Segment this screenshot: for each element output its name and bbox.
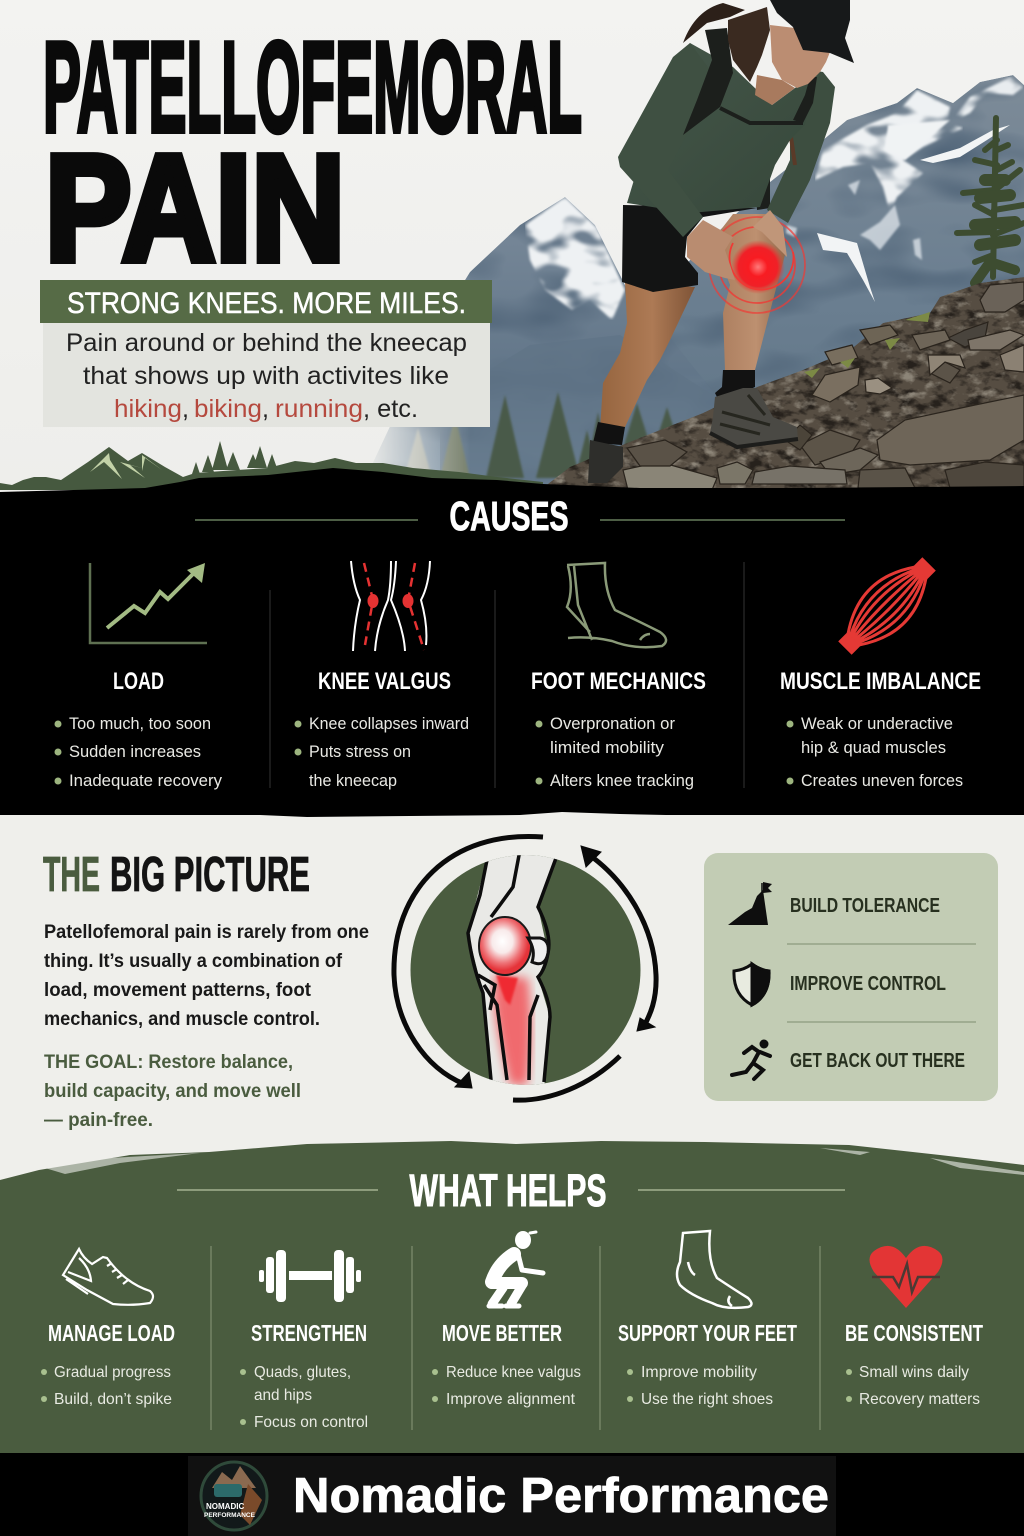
help: move better: Reduce knee valgus: [446, 1364, 581, 1381]
big picture heading: THE: [43, 848, 100, 902]
rocky slope foreground: [540, 277, 1024, 490]
help: strengthen: and hips: [254, 1387, 312, 1404]
what helps heading: WHAT HELPS: [410, 1165, 606, 1216]
title: [43, 16, 582, 292]
definition text box: Pain around or behind the kneecap: [66, 329, 467, 357]
big picture paragraph: load, movement patterns, foot: [44, 980, 312, 1001]
big picture heading: BIG PICTURE: [110, 848, 310, 902]
action panel: IMPROVE CONTROL: [790, 973, 946, 995]
icon: shield: [734, 964, 769, 1005]
front shoe: [710, 388, 798, 448]
definition text box: hiking: [114, 395, 182, 423]
knee bones: [468, 850, 559, 1090]
causes heading: CAUSES: [450, 493, 568, 539]
left snowy peak with fog fade: [373, 197, 674, 484]
right arm: [767, 70, 835, 223]
action panel: GET BACK OUT THERE: [790, 1050, 965, 1072]
help: manage load: [41, 1249, 175, 1408]
jacket torso: [627, 43, 815, 213]
logo badge: PERFORMANCE: [204, 1512, 256, 1519]
tagline banner: STRONG KNEES. MORE MILES.: [67, 287, 466, 320]
ponytail: [683, 3, 745, 43]
help: manage load: Build, don’t spike: [54, 1391, 172, 1408]
cause: knee valgus: Knee collapses inward: [309, 715, 469, 733]
face: [770, 25, 830, 88]
hiker: [588, 0, 854, 483]
cause: foot mechanics: [531, 563, 706, 790]
right hand: [753, 210, 787, 257]
neck: [755, 75, 795, 105]
cause: knee valgus: Puts stress on: [309, 743, 411, 761]
definition text box: ,: [262, 395, 269, 423]
icon: runner: [732, 1040, 770, 1079]
big picture heading: [43, 848, 310, 902]
cause: foot mechanics: Overpronation or: [550, 715, 675, 733]
cause: foot mechanics: Alters knee tracking: [550, 772, 694, 790]
the goal statement: build capacity, and move well: [44, 1081, 301, 1102]
backpack back piece: [753, 167, 770, 210]
help: support your feet: Improve mobility: [641, 1364, 757, 1381]
cause: muscle imbalance: Weak or underactive: [801, 715, 953, 733]
icon: knees collapsing inward: [351, 561, 430, 651]
definition text box: [43, 323, 490, 427]
icon: rising load chart: [90, 563, 207, 643]
help: move better: [432, 1231, 581, 1408]
big picture paragraph: mechanics, and muscle control.: [44, 1009, 320, 1030]
icon: running shoe: [63, 1249, 153, 1305]
action panel: [704, 853, 998, 1101]
cause: foot mechanics: FOOT MECHANICS: [531, 668, 706, 695]
tagline banner: [40, 280, 492, 323]
cause: load: Inadequate recovery: [69, 772, 223, 790]
big picture paragraph: [44, 922, 369, 1030]
definition text box: that shows up with activites like: [83, 362, 449, 390]
green circle: [410, 855, 640, 1085]
definition text box: ,: [182, 395, 189, 423]
knee diagram with cycle arrows: [394, 836, 656, 1100]
help: manage load: Gradual progress: [54, 1364, 171, 1381]
knee pain glow with rings: [709, 217, 805, 313]
back leg: [600, 282, 695, 430]
logo badge: NOMADIC: [206, 1502, 244, 1511]
the goal statement: THE GOAL: Restore balance,: [44, 1052, 293, 1073]
cause: knee valgus: KNEE VALGUS: [318, 668, 451, 695]
cycle arrows: [394, 836, 656, 1100]
logo badge: [201, 1462, 267, 1530]
help: manage load: MANAGE LOAD: [48, 1320, 175, 1346]
back shoe: [588, 440, 623, 483]
help: support your feet: [618, 1231, 797, 1408]
causes section background: [0, 468, 1024, 817]
front sock: [715, 370, 755, 403]
help: be consistent: [845, 1246, 983, 1408]
icon: bare foot: [677, 1231, 752, 1308]
brand name: Nomadic Performance: [293, 1469, 829, 1523]
help: support your feet: SUPPORT YOUR FEET: [618, 1320, 797, 1346]
cause: foot mechanics: limited mobility: [550, 739, 665, 757]
cause: load: LOAD: [113, 668, 164, 695]
icon: summit flag: [728, 882, 772, 925]
cause: load: [54, 563, 223, 790]
help: strengthen: Focus on control: [254, 1414, 368, 1431]
title: PAIN: [45, 123, 345, 292]
cap: [770, 0, 854, 63]
definition text box: , etc.: [363, 395, 418, 423]
left arm: [618, 43, 710, 237]
help: be consistent: Recovery matters: [859, 1391, 980, 1408]
definition text box: biking: [194, 395, 262, 423]
icon: foot outline: [567, 563, 666, 647]
shorts: [622, 205, 757, 292]
big picture paragraph: Patellofemoral pain is rarely from one: [44, 922, 369, 943]
help: strengthen: STRENGTHEN: [251, 1320, 367, 1346]
footer band: [0, 1453, 1024, 1536]
help: strengthen: [240, 1250, 368, 1431]
help: move better: Improve alignment: [446, 1391, 576, 1408]
cause: muscle imbalance: Creates uneven forces: [801, 772, 963, 790]
backpack straps: [683, 28, 817, 135]
patella: [479, 917, 531, 975]
front leg: [713, 214, 785, 370]
cause: knee valgus: [294, 561, 469, 790]
definition text box: running: [275, 395, 363, 423]
far mountain range: [620, 75, 1024, 490]
distant pine trees: [404, 392, 676, 478]
icon: squat figure: [489, 1231, 543, 1306]
left hand: [687, 220, 735, 280]
icon: red muscle: [829, 548, 945, 664]
big picture paragraph: thing. It’s usually a combination of: [44, 951, 343, 972]
icon: dumbbell: [259, 1250, 361, 1302]
cause: muscle imbalance: hip & quad muscles: [801, 739, 946, 757]
help: strengthen: Quads, glutes,: [254, 1364, 351, 1381]
green ridge with mountains and trees: [0, 441, 543, 490]
the goal statement: — pain-free.: [44, 1110, 153, 1131]
large pine on right: [957, 118, 1024, 283]
help: support your feet: Use the right shoes: [641, 1391, 773, 1408]
what helps section background: [0, 1141, 1024, 1460]
cause: load: Too much, too soon: [69, 715, 211, 733]
help: move better: MOVE BETTER: [442, 1320, 562, 1346]
icon: heart with pulse: [870, 1246, 942, 1308]
cause: muscle imbalance: [780, 548, 981, 790]
the goal statement: [44, 1052, 301, 1131]
hair: [728, 7, 770, 82]
action panel: BUILD TOLERANCE: [790, 895, 940, 917]
cause: knee valgus: the kneecap: [309, 772, 397, 790]
back sock: [593, 422, 625, 445]
hero photo: hiker on mountain trail: [373, 0, 1024, 488]
help: be consistent: Small wins daily: [859, 1364, 969, 1381]
cause: load: Sudden increases: [69, 743, 201, 761]
